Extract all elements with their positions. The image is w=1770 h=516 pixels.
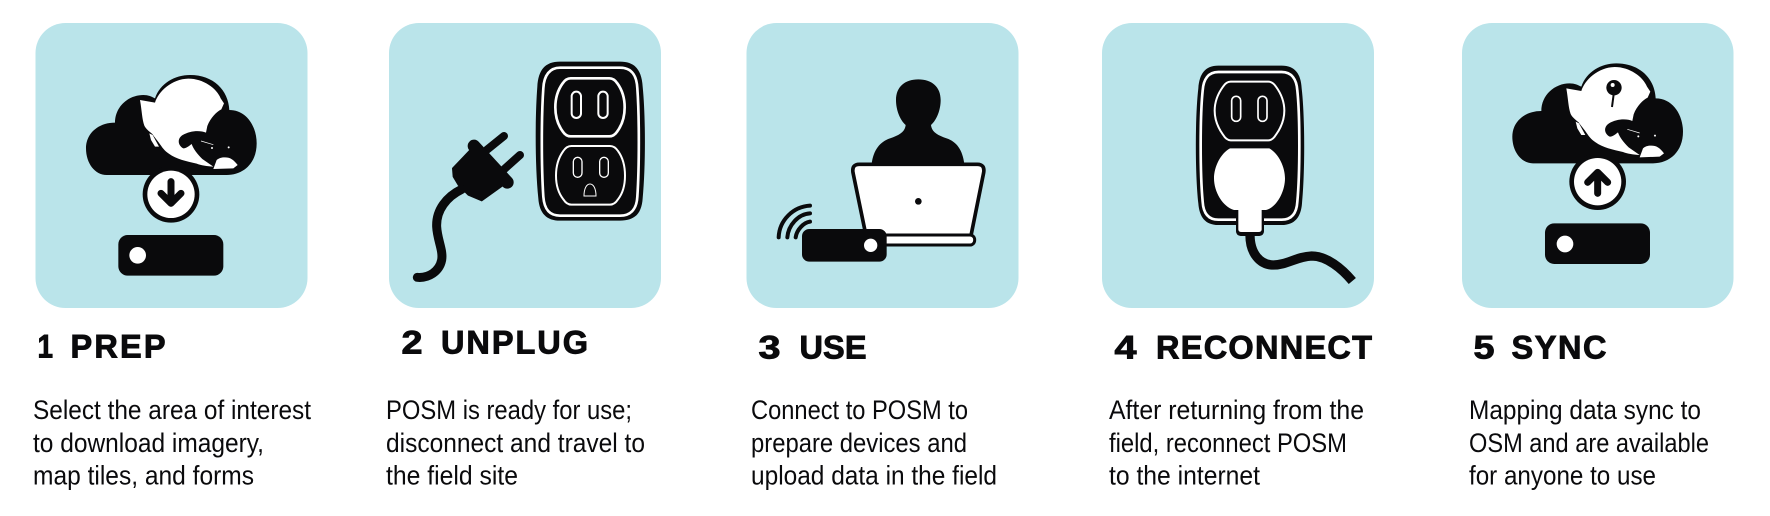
- description: After returning from the: [1109, 395, 1364, 425]
- heading: UNPLUG: [441, 324, 588, 360]
- description: upload data in the field: [751, 460, 997, 490]
- description: [751, 395, 997, 490]
- description: Mapping data sync to: [1469, 395, 1701, 425]
- panel: step 4 reconnect: [1102, 23, 1374, 490]
- icon: person at laptop with wifi device: [779, 79, 984, 262]
- card background: [389, 23, 661, 308]
- panel: step 3 use: [746, 23, 1018, 490]
- description: [386, 395, 645, 490]
- description: [33, 395, 312, 490]
- description: OSM and are available: [1469, 428, 1709, 458]
- card background: [1462, 23, 1734, 308]
- panel: step 5 sync: [1462, 23, 1734, 490]
- description: prepare devices and: [751, 428, 967, 458]
- description: [1469, 395, 1709, 490]
- description: map tiles, and forms: [33, 460, 254, 490]
- heading: PREP: [70, 328, 166, 364]
- icon: cloud with world map, download arrow and device: [86, 75, 257, 276]
- panel: step 1 prep: [33, 23, 312, 490]
- card background: [1102, 23, 1374, 308]
- card background: [746, 23, 1018, 308]
- heading: SYNC: [1512, 330, 1606, 366]
- description: Select the area of interest: [33, 395, 312, 425]
- icon: cloud with pinned world map, upload arrow and device: [1512, 63, 1683, 264]
- heading: USE: [800, 330, 866, 366]
- description: for anyone to use: [1469, 460, 1656, 490]
- description: POSM is ready for use;: [386, 395, 632, 425]
- panel: step 2 unplug: [386, 23, 661, 490]
- heading: 3: [758, 330, 780, 366]
- description: to the internet: [1109, 460, 1261, 490]
- card background: [36, 23, 308, 308]
- description: disconnect and travel to: [386, 428, 645, 458]
- description: the field site: [386, 460, 518, 490]
- heading: 5: [1474, 330, 1494, 366]
- description: [1109, 395, 1364, 490]
- description: Connect to POSM to: [751, 395, 968, 425]
- heading: 1: [38, 328, 53, 364]
- description: to download imagery,: [33, 428, 264, 458]
- heading: [758, 330, 866, 366]
- icon: plug and wall outlet: [417, 62, 645, 277]
- heading: RECONNECT: [1156, 330, 1372, 366]
- heading: 2: [402, 324, 422, 360]
- description: field, reconnect POSM: [1109, 428, 1347, 458]
- icon: plugged-in outlet with cord: [1196, 66, 1352, 281]
- heading: 4: [1114, 330, 1136, 366]
